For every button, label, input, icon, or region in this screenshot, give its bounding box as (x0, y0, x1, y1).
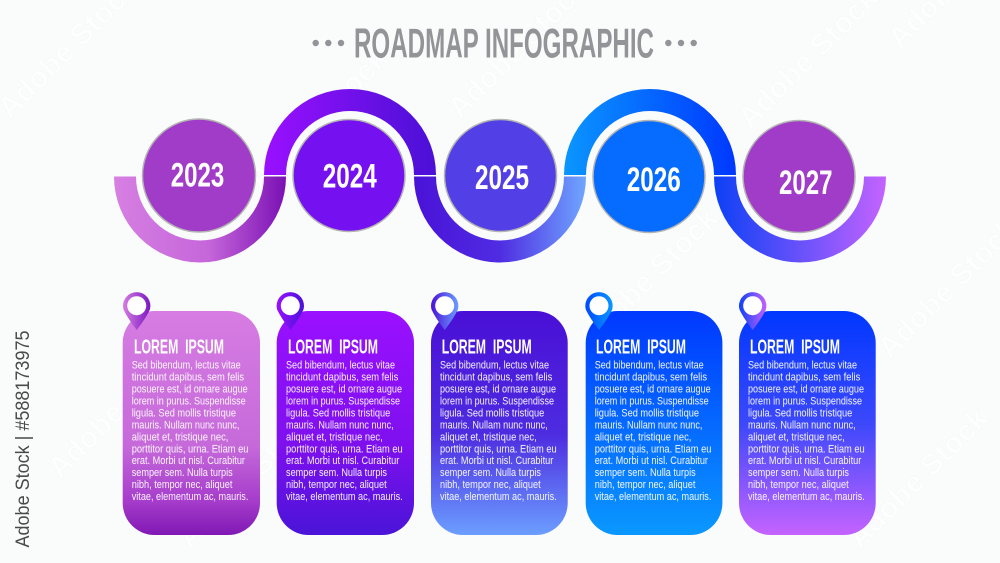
body text: vitae, elementum ac, mauris. (595, 491, 711, 503)
body text: ligula. Sed mollis tristique (440, 408, 544, 420)
text: Adobe Stock (572, 202, 725, 355)
body text: mauris. Nullam nunc nunc, (440, 419, 548, 431)
body text: lorem in purus. Suspendisse (132, 396, 246, 408)
text: Adobe Stock (842, 402, 995, 555)
icon: pin 4 (585, 292, 613, 330)
body text: aliquet et, tristique nec, (440, 431, 537, 443)
body text: porttitor quis, urna. Etiam eu (286, 443, 403, 455)
body text (748, 360, 865, 503)
body text: aliquet et, tristique nec, (132, 431, 228, 443)
body text: lorem in purus. Suspendisse (748, 396, 862, 408)
arc 4 (564, 89, 736, 175)
body text: erat. Morbi ut nisl. Curabitur (595, 455, 708, 467)
icon: pin 1 (123, 292, 150, 330)
arc 5 (714, 176, 886, 262)
body text: nibh, tempor nec, aliquet (440, 479, 541, 491)
body text: lorem in purus. Suspendisse (595, 396, 709, 408)
title (312, 20, 697, 67)
panel: card 3 (431, 292, 568, 535)
body text: porttitor quis, urna. Etiam eu (132, 443, 248, 455)
stock credit: Adobe Stock | #588173975 (13, 330, 34, 548)
body text: aliquet et, tristique nec, (748, 431, 845, 443)
body text: aliquet et, tristique nec, (595, 431, 691, 443)
text: Adobe Stock (172, 402, 325, 555)
body text: mauris. Nullam nunc nunc, (132, 419, 239, 431)
year 2027 (743, 120, 855, 232)
year 2024 (293, 120, 405, 232)
body text: porttitor quis, urna. Etiam eu (748, 443, 865, 455)
body text: semper sem. Nulla turpis (286, 467, 387, 479)
title text: ROADMAP INFOGRAPHIC (354, 20, 654, 67)
title dots right (665, 40, 697, 46)
body text (132, 360, 248, 503)
body text: tincidunt dapibus, sem felis (286, 372, 399, 384)
year 2025: 2025 (475, 159, 529, 197)
body text: posuere est, id ornare augue (132, 384, 248, 396)
body text: semper sem. Nulla turpis (595, 467, 696, 479)
body text: posuere est, id ornare augue (748, 384, 864, 396)
year 2023 (142, 119, 256, 232)
body text: semper sem. Nulla turpis (132, 467, 233, 479)
body text: ligula. Sed mollis tristique (595, 408, 699, 420)
year 2026 (593, 120, 705, 232)
arc 1 (114, 176, 286, 262)
text: Adobe Stock (242, 42, 395, 195)
body text: vitae, elementum ac, mauris. (440, 491, 557, 503)
arc 2 (264, 89, 436, 175)
body text: nibh, tempor nec, aliquet (132, 479, 233, 491)
body text: tincidunt dapibus, sem felis (595, 372, 707, 384)
body text: nibh, tempor nec, aliquet (748, 479, 849, 491)
body text: erat. Morbi ut nisl. Curabitur (440, 455, 553, 467)
heading: LOREM IPSUM (134, 336, 224, 359)
body text: Sed bibendum, lectus vitae (595, 360, 704, 372)
heading: LOREM IPSUM (596, 336, 686, 359)
body text: nibh, tempor nec, aliquet (595, 479, 696, 491)
body text: posuere est, id ornare augue (440, 384, 556, 396)
body text: mauris. Nullam nunc nunc, (595, 419, 702, 431)
body text: tincidunt dapibus, sem felis (440, 372, 553, 384)
text: Adobe Stock (42, 332, 195, 485)
timeline ribbon (114, 89, 886, 262)
body text: ligula. Sed mollis tristique (748, 408, 852, 420)
body text: vitae, elementum ac, mauris. (286, 491, 403, 503)
body text: semper sem. Nulla turpis (748, 467, 849, 479)
heading: LOREM IPSUM (288, 336, 378, 359)
panel: card 2 (277, 292, 414, 535)
year 2027: 2027 (779, 164, 832, 202)
body text: ligula. Sed mollis tristique (132, 408, 236, 420)
body text: Sed bibendum, lectus vitae (286, 360, 395, 372)
body text (595, 360, 711, 503)
body text: ligula. Sed mollis tristique (286, 408, 390, 420)
body text: semper sem. Nulla turpis (440, 467, 541, 479)
body text: Sed bibendum, lectus vitae (132, 360, 241, 372)
panel: card 1 (123, 292, 260, 535)
body text: Sed bibendum, lectus vitae (748, 360, 857, 372)
icon: pin 3 (431, 292, 458, 330)
year 2025 (444, 120, 556, 232)
body text: tincidunt dapibus, sem felis (132, 372, 244, 384)
body text: erat. Morbi ut nisl. Curabitur (748, 455, 861, 467)
year 2026: 2026 (627, 161, 681, 199)
body text: vitae, elementum ac, mauris. (132, 491, 248, 503)
body text: aliquet et, tristique nec, (286, 431, 383, 443)
icon: pin 5 (739, 292, 766, 330)
panel: card 5 (739, 292, 876, 535)
body text: nibh, tempor nec, aliquet (286, 479, 387, 491)
body text: porttitor quis, urna. Etiam eu (440, 443, 557, 455)
body text: erat. Morbi ut nisl. Curabitur (286, 455, 399, 467)
body text: posuere est, id ornare augue (595, 384, 711, 396)
body text (286, 360, 403, 503)
heading: LOREM IPSUM (442, 336, 532, 359)
panel: card 4 (585, 292, 722, 535)
body text: lorem in purus. Suspendisse (440, 396, 554, 408)
body text: posuere est, id ornare augue (286, 384, 402, 396)
title dots left (312, 40, 344, 46)
arc 3 (414, 176, 586, 262)
body text: porttitor quis, urna. Etiam eu (595, 443, 711, 455)
body text: tincidunt dapibus, sem felis (748, 372, 861, 384)
body text: mauris. Nullam nunc nunc, (286, 419, 394, 431)
body text: mauris. Nullam nunc nunc, (748, 419, 856, 431)
heading: LOREM IPSUM (750, 336, 840, 359)
body text: erat. Morbi ut nisl. Curabitur (132, 455, 245, 467)
body text (440, 360, 557, 503)
body text: Sed bibendum, lectus vitae (440, 360, 549, 372)
icon: pin 2 (277, 292, 304, 330)
body text: vitae, elementum ac, mauris. (748, 491, 865, 503)
body text: lorem in purus. Suspendisse (286, 396, 400, 408)
year 2024: 2024 (323, 158, 377, 196)
year 2023: 2023 (171, 157, 224, 195)
